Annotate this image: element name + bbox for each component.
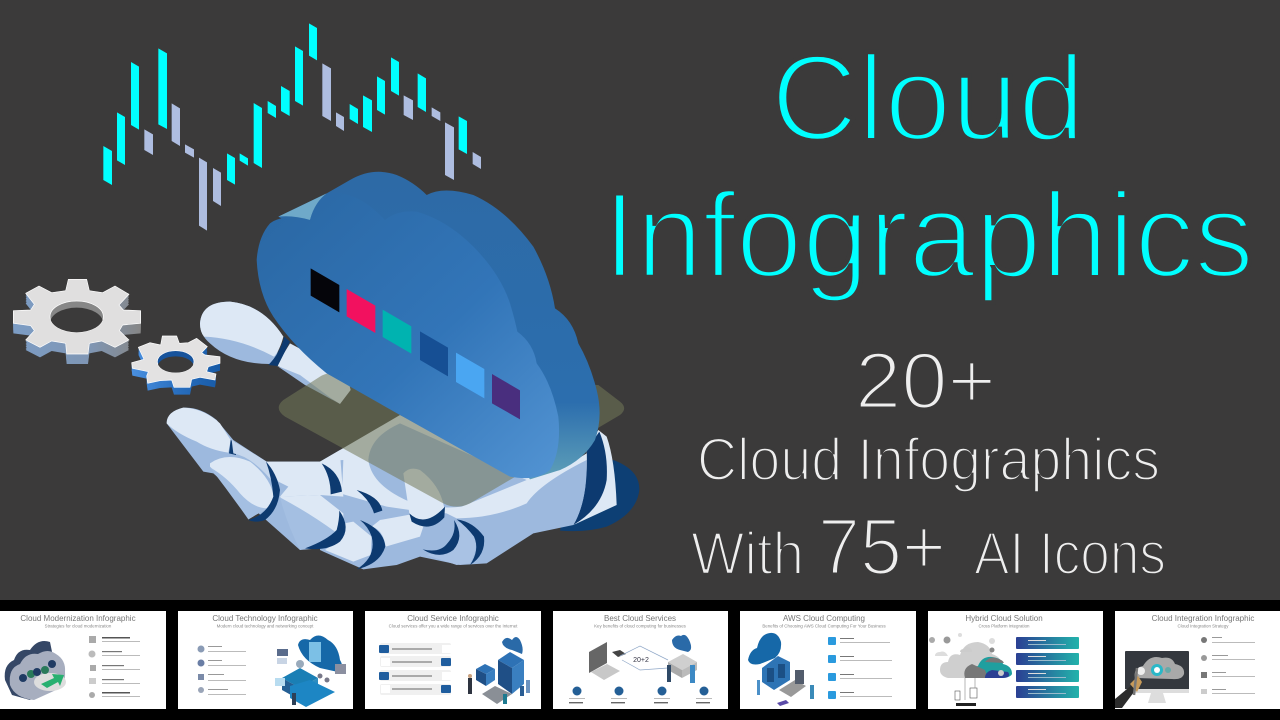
card: Cloud Service	[365, 611, 541, 709]
card: Hybrid Cloud Solution: Hybrid Cloud Solution	[965, 614, 1043, 623]
card: Cloud Modernization	[0, 611, 166, 709]
title: Infographics	[603, 167, 1254, 303]
subtitle: Cloud Infographics	[697, 426, 1160, 493]
thumbnail strip	[0, 600, 1280, 720]
subtitle: icons count	[691, 502, 1166, 591]
card: Cloud Modernization: Cloud Modernization Infographic	[20, 614, 136, 623]
robot hand	[167, 302, 639, 569]
wrist socket	[560, 430, 639, 531]
cloud front face	[257, 193, 559, 478]
hybrid cloud illustration	[929, 633, 1012, 706]
laptop illustration: 20+2	[633, 657, 649, 664]
translucent platform	[279, 373, 624, 507]
card: Cloud Service: Cloud Service Infographic	[407, 614, 499, 623]
upper finger	[200, 302, 351, 404]
cloud and server illustration	[748, 633, 814, 706]
palm base	[320, 415, 587, 569]
cloud illustration	[5, 641, 66, 700]
title: Cloud	[771, 30, 1085, 166]
icon: small gear	[132, 336, 220, 395]
card: AWS Cloud Computing	[740, 611, 916, 709]
card: Cloud Service: Cloud services offer you a wide range of services over the Internet	[389, 624, 518, 628]
subtitle: icons count: AI Icons	[974, 520, 1166, 587]
lower fingers	[167, 408, 343, 550]
card: Best Cloud Services: Best Cloud Services	[604, 614, 676, 623]
card: Best Cloud Services: Key benefits of cloud computing for businesses	[594, 624, 687, 628]
card: Cloud Integration: Cloud Integration Strategy	[1177, 624, 1229, 628]
card: Cloud Technology: Cloud Technology Infographic	[212, 614, 318, 623]
service rows	[379, 643, 451, 695]
subtitle: icons count: 75+	[818, 502, 946, 591]
list items	[88, 636, 140, 698]
server illustration	[468, 637, 530, 704]
gradient bars	[1016, 637, 1079, 698]
icon: large gear	[13, 279, 141, 364]
card: Best Cloud Services	[553, 611, 728, 709]
card: Hybrid Cloud Solution	[928, 611, 1103, 709]
server and cloud illustration	[667, 635, 697, 683]
cloud side	[278, 172, 600, 479]
list items	[198, 646, 246, 695]
colour squares	[311, 268, 520, 419]
card: Cloud Integration	[1115, 611, 1280, 709]
palm details	[305, 463, 484, 569]
benefit list	[828, 637, 892, 699]
cloud	[257, 172, 600, 479]
monitor illustration	[1115, 651, 1189, 708]
card: Cloud Integration: Cloud Integration Infographic	[1152, 614, 1254, 623]
card: Hybrid Cloud Solution: Cross Platform Integration	[978, 624, 1030, 628]
list items	[1201, 637, 1255, 694]
isometric bar chart	[103, 23, 481, 231]
card: AWS Cloud Computing: Benefits of Choosing AWS Cloud Computing For Your Business	[762, 624, 886, 628]
server and cloud illustration	[275, 636, 346, 707]
cloud top highlight	[278, 193, 327, 220]
card: Cloud Technology: Modern cloud technology and networking concept	[217, 624, 314, 628]
laptop illustration	[589, 642, 668, 680]
subtitle: icons count: With	[691, 520, 804, 587]
count: 20+: 20+	[855, 336, 996, 425]
card: Cloud Modernization: Strategies for cloud modernization	[45, 624, 112, 628]
benefit circles	[569, 686, 712, 703]
title	[603, 30, 1254, 303]
card: AWS Cloud Computing: AWS Cloud Computing	[783, 614, 865, 623]
card: Cloud Technology	[178, 611, 353, 709]
